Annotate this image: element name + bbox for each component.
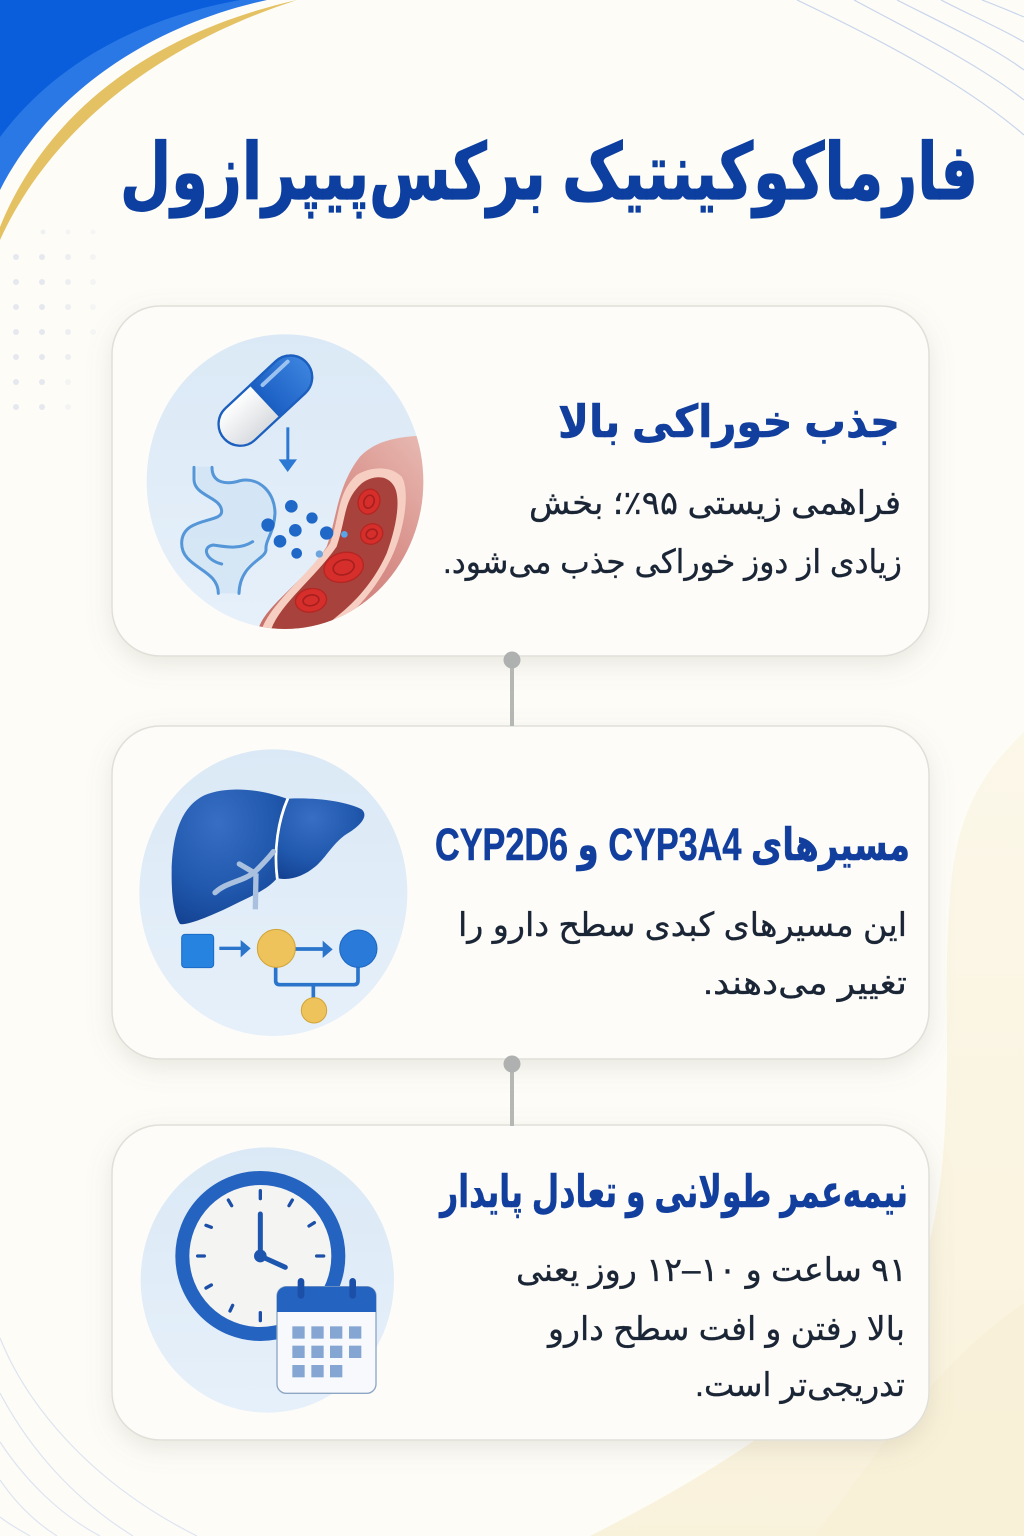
heading: جذب خوراکی بالا [558, 396, 900, 448]
card background [112, 306, 929, 656]
body text: تدریجی‌تر است. [695, 1366, 905, 1404]
body text [516, 1251, 907, 1404]
top-left blue corner swoosh [0, 0, 297, 240]
card background [112, 1125, 929, 1440]
body text: بالا رفتن و افت سطح دارو [546, 1310, 905, 1348]
panel: CYP3A4 and CYP2D6 pathways [112, 726, 929, 1059]
body text: زیادی از دوز خوراکی جذب می‌شود. [443, 543, 902, 581]
heading: مسیرهای CYP3A4 و CYP2D6 [435, 819, 910, 871]
card background [112, 726, 929, 1059]
body text [443, 484, 902, 581]
body text: این مسیرهای کبدی سطح دارو را [458, 906, 907, 944]
connector: card 1 to card 2 [504, 652, 520, 726]
icon: clock and calendar [141, 1147, 394, 1413]
panel: high oral absorption [112, 306, 929, 656]
decorative dot grid [13, 230, 96, 410]
panel: long half-life and steady state [112, 1125, 929, 1440]
body text [458, 906, 907, 1002]
body text: فراهمی زیستی ۹۵٪؛ بخش [529, 484, 901, 522]
icon: liver and metabolic pathway [139, 749, 407, 1036]
decorative contour lines bottom left [0, 1338, 197, 1536]
decorative contour lines top right [797, 0, 1024, 135]
connector: card 2 to card 3 [504, 1056, 520, 1126]
body text: ۹۱ ساعت و ۱۰–۱۲ روز یعنی [516, 1251, 907, 1289]
body text: تغییر می‌دهند. [703, 964, 907, 1002]
icon: capsule, gut and blood vessel [147, 334, 430, 633]
